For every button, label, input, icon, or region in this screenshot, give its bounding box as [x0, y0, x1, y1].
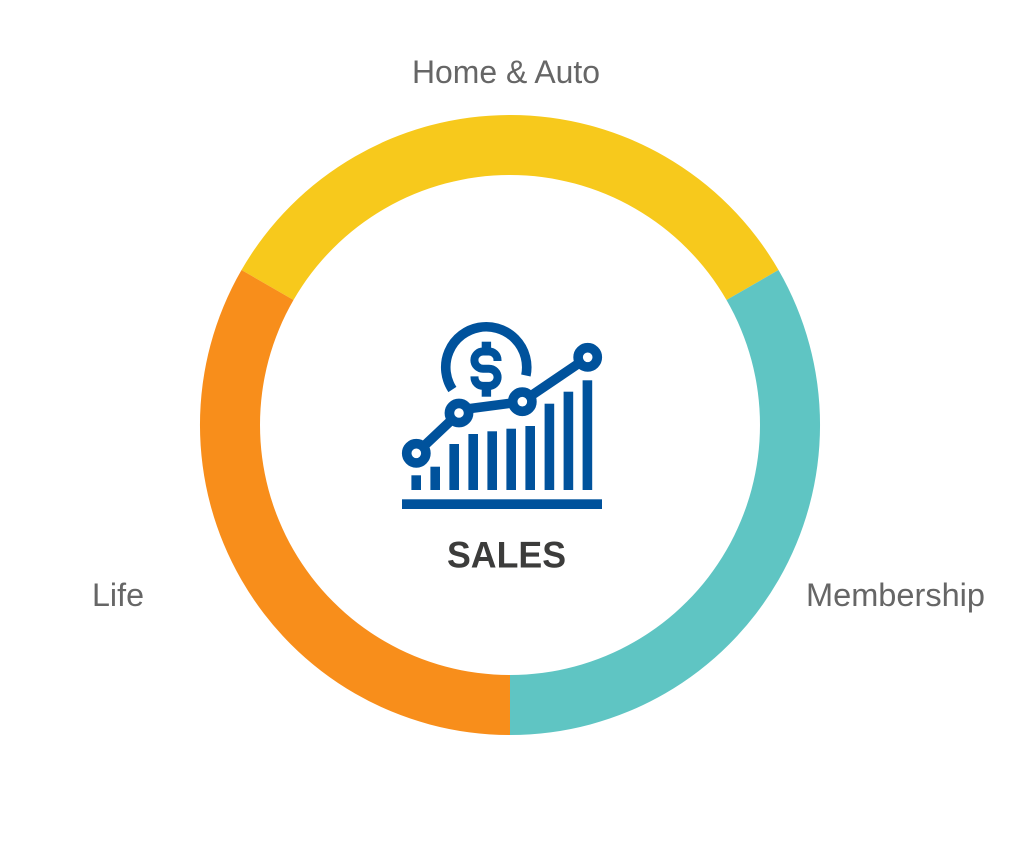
segment: Home & Auto — [242, 115, 778, 300]
icon: dollar coin — [446, 327, 527, 397]
icon: bars — [411, 380, 592, 490]
icon: sales growth chart — [402, 327, 602, 509]
heading: SALES: SALES — [447, 534, 566, 576]
icon: baseline — [402, 499, 602, 509]
label: Life: Life — [92, 577, 144, 613]
segment: Membership — [510, 270, 820, 735]
segment: Life — [200, 270, 510, 735]
label: Home & Auto: Home & Auto — [412, 54, 600, 90]
icon: trend line — [407, 348, 597, 463]
donut chart — [200, 115, 820, 735]
label: Membership: Membership — [806, 577, 985, 613]
